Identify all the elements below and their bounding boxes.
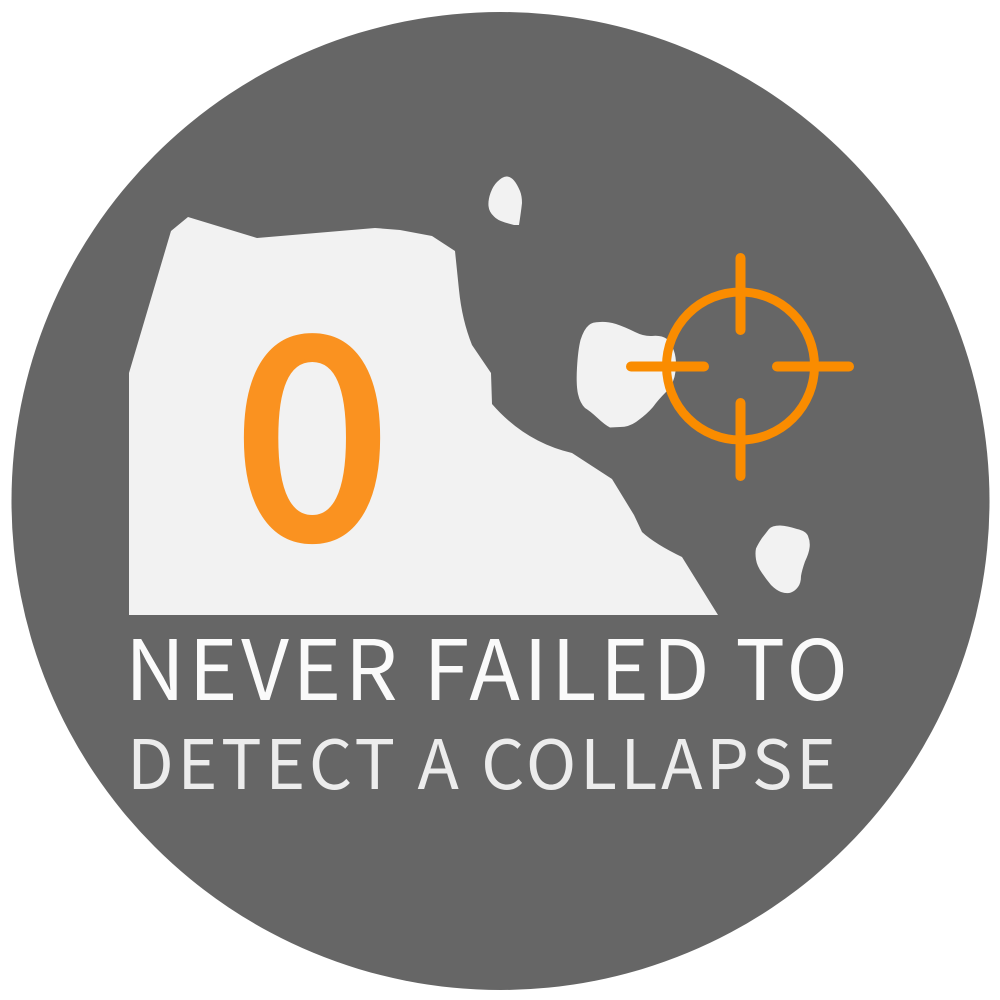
subheading: detect a collapse: DETECT A COLLAPSE xyxy=(127,710,836,809)
number zero: 0 xyxy=(232,216,392,620)
icon: falling rock bottom xyxy=(756,526,810,593)
icon: falling rock top xyxy=(488,176,522,225)
icon: cliff xyxy=(129,217,718,615)
heading: never failed to: NEVER FAILED TO xyxy=(125,604,848,724)
icon: orange crosshair target xyxy=(631,258,849,476)
icon: falling rock middle xyxy=(577,322,676,428)
